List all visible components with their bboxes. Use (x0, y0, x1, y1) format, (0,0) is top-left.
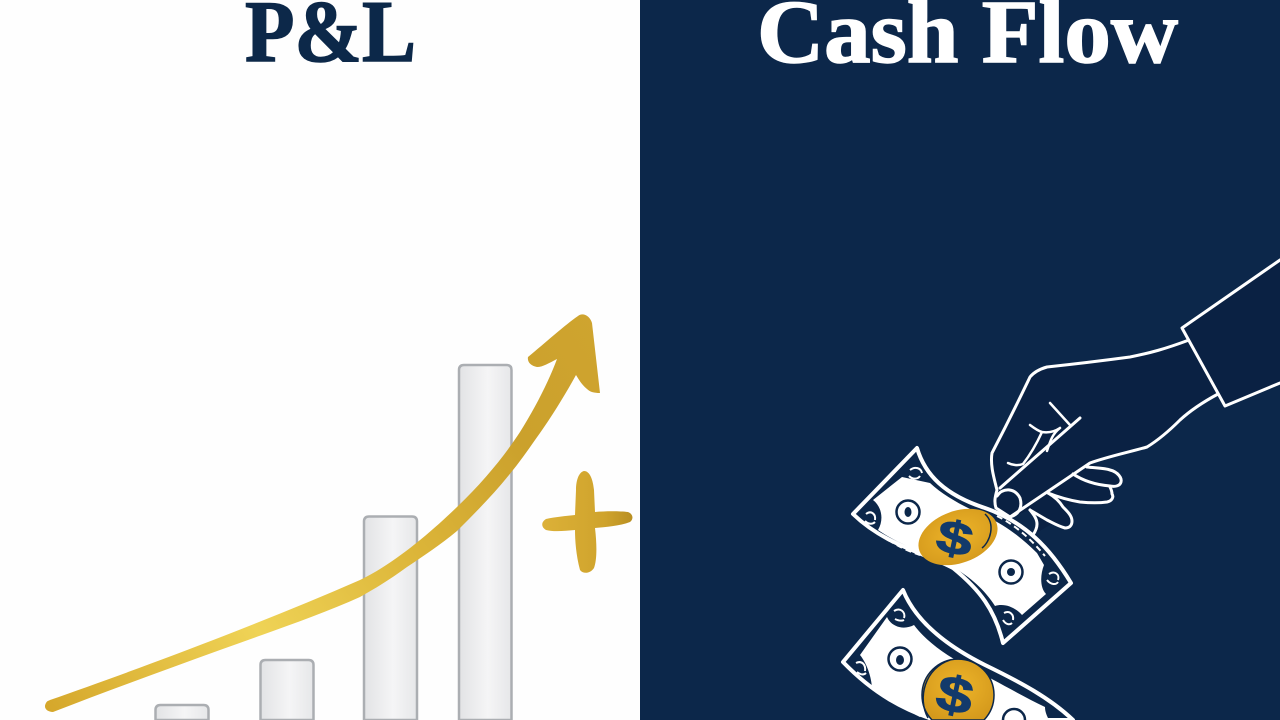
suit sleeve (1182, 260, 1280, 406)
icon: lower dollar bill (843, 590, 1073, 720)
coin with dollar sign (922, 659, 994, 720)
coin with dollar sign: $ (932, 509, 978, 567)
bill corners (856, 610, 922, 717)
icon: hand holding bill (991, 260, 1280, 535)
bill paper (860, 617, 1049, 720)
icon: upper dollar bill (853, 448, 1071, 643)
bill outline (853, 448, 1071, 643)
panel: Cash Flow (640, 0, 1280, 720)
bill paper (873, 477, 1046, 615)
icon: plus sign (542, 471, 632, 573)
coin with dollar sign (911, 499, 1005, 575)
arrow: rising gold trend (45, 314, 600, 712)
bill corners (865, 468, 1058, 624)
hand fill (991, 340, 1218, 535)
index finger line (1000, 418, 1080, 488)
bill seals (888, 648, 912, 670)
panel: P&L (0, 0, 640, 720)
underside outline (1010, 394, 1218, 517)
bill outline (843, 590, 1073, 720)
bar chart (156, 365, 512, 720)
bill seals (896, 500, 920, 524)
thumb (997, 490, 1021, 517)
knuckle wrinkles (1008, 403, 1070, 465)
fingers (1073, 467, 1121, 486)
back of hand outline (991, 340, 1189, 517)
